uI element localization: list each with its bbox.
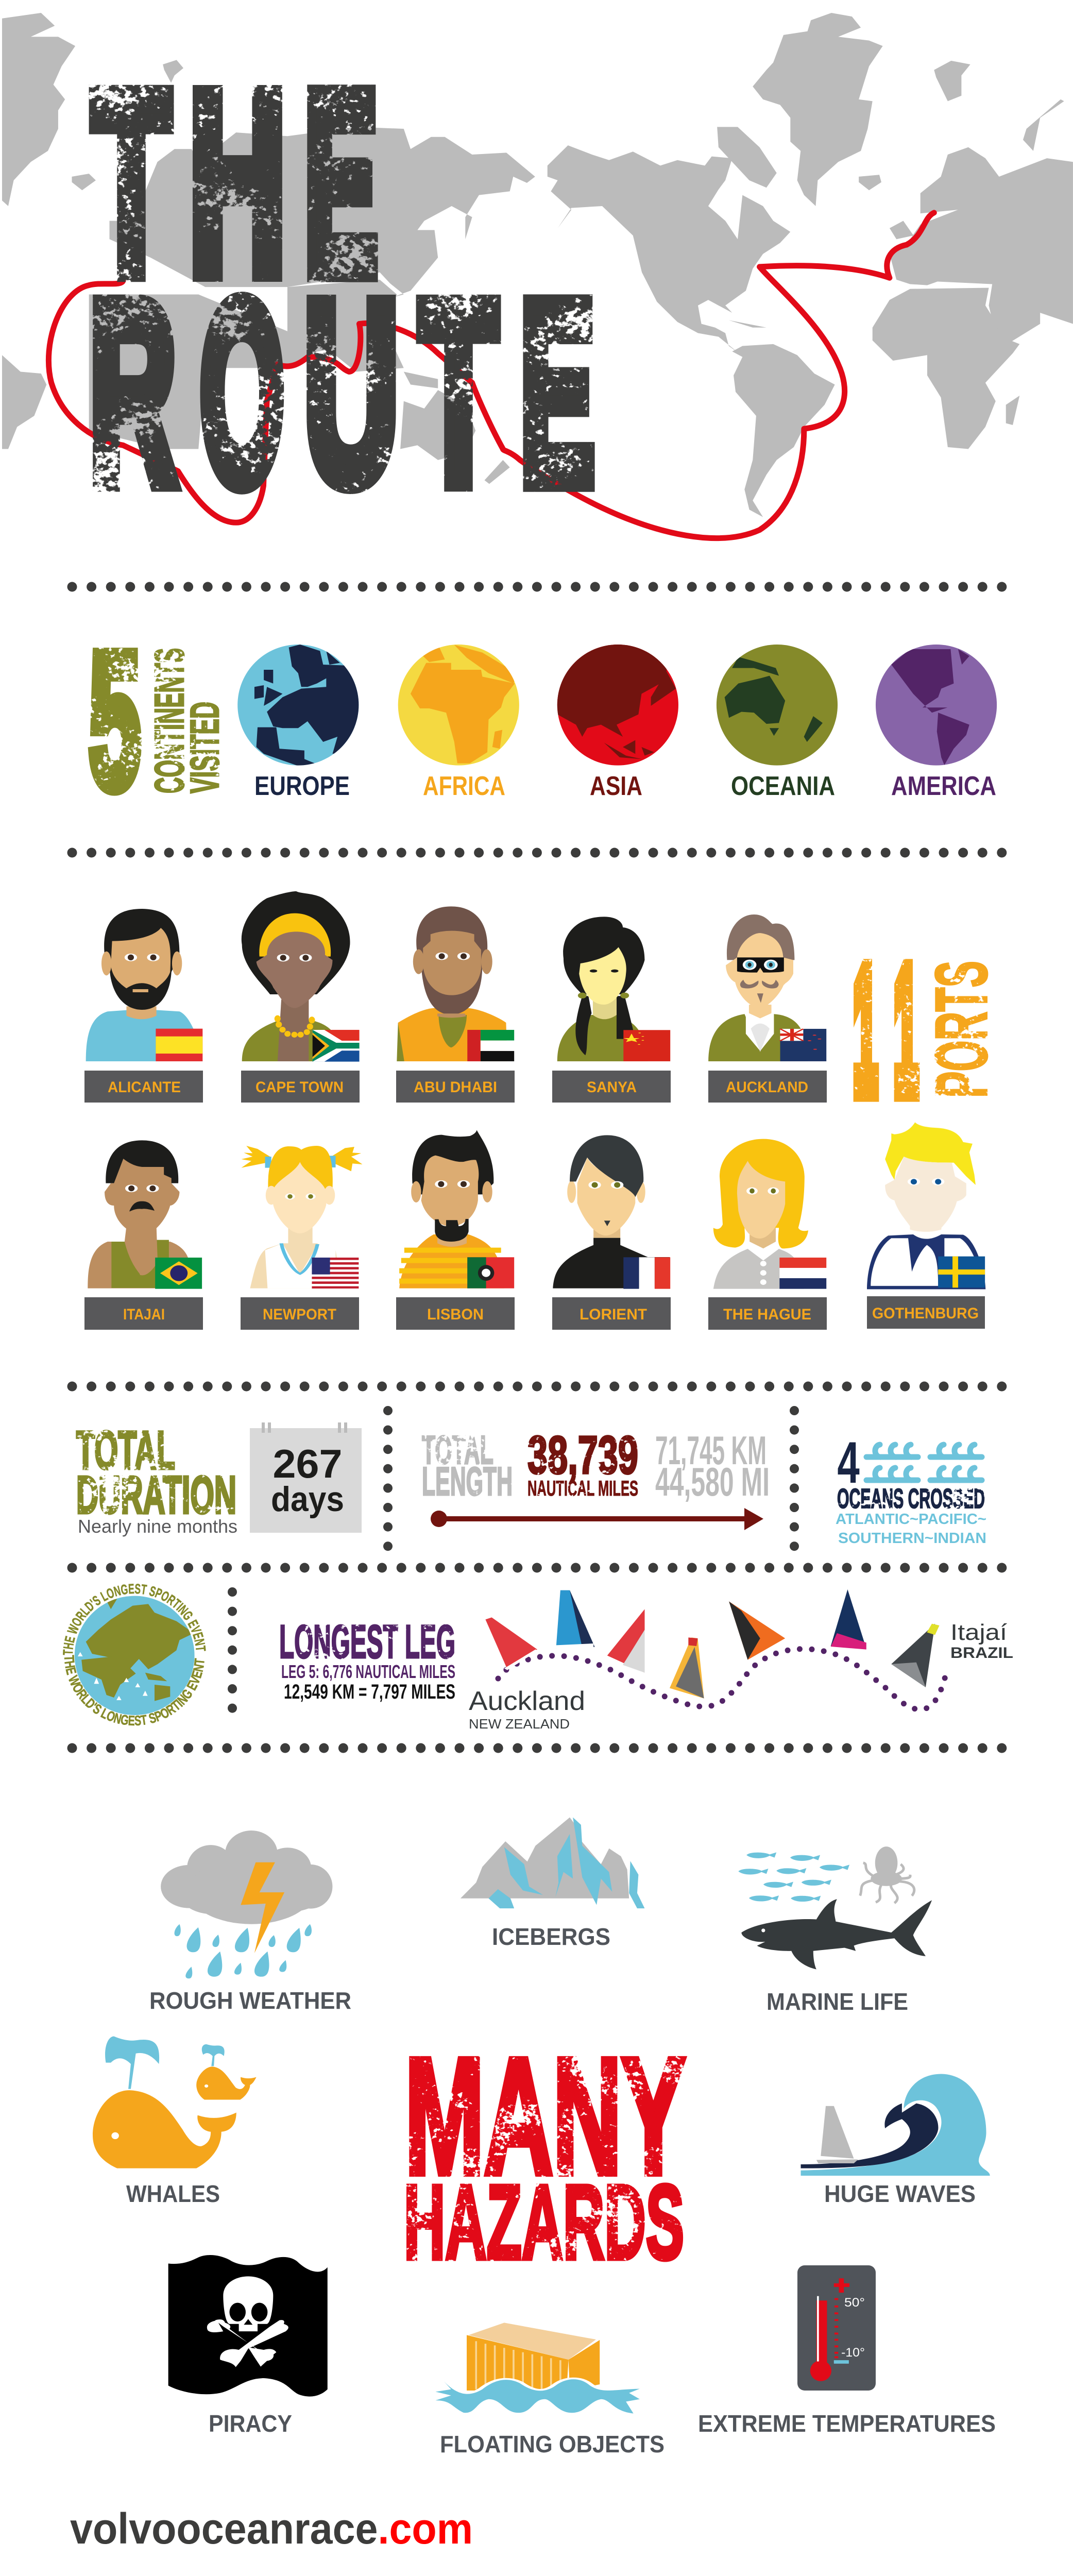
label: port names row two: NEWPORT: [263, 1306, 336, 1323]
heading: total duration: [76, 1420, 236, 1524]
heading: 11 ports: PORTS: [921, 961, 1002, 1098]
label: port names row two: [84, 1296, 985, 1330]
heading: total length: TOTAL: [422, 1427, 493, 1472]
port: Cape Town: [242, 891, 360, 1062]
ring text: [63, 1584, 206, 1726]
figures: km and miles: 71,745 KM: [655, 1428, 767, 1473]
label: port names row two: THE HAGUE: [723, 1306, 811, 1323]
panel: total length: [422, 1426, 770, 1530]
label: port names row one: SANYA: [587, 1079, 637, 1096]
text: ocean names: ATLANTIC~PACIFIC~: [836, 1511, 986, 1528]
title: THE ROUTE: O: [200, 249, 284, 536]
label: port names row two: LISBON: [427, 1306, 484, 1323]
footer: website: volvooceanrace.com: [70, 2504, 473, 2553]
icon: container in waves: [435, 2323, 640, 2413]
figure: 38,739 nautical miles: [527, 1426, 638, 1500]
icon: fish, octopus and shark: [738, 1846, 932, 1969]
label: huge waves: HUGE WAVES: [824, 2180, 976, 2207]
map: grey continents: [2, 13, 1073, 517]
title: THE ROUTE: E: [520, 250, 594, 536]
title: THE ROUTE: H: [189, 40, 286, 327]
hazard: icebergs: [461, 1818, 644, 1950]
panel: 5 continents visited: [88, 645, 997, 796]
text: km and miles: 12,549 KM = 7,797 MILES: [284, 1681, 455, 1703]
heading: 11 ports: [853, 931, 1002, 1129]
label: port names row two: GOTHENBURG: [872, 1305, 979, 1322]
label: floating objects: FLOATING OBJECTS: [440, 2431, 665, 2458]
heading: longest leg: LONGEST LEG: [279, 1616, 455, 1668]
heading: many hazards: [404, 2024, 685, 2281]
port: Itajai: [88, 1140, 202, 1289]
heading: many hazards: MANY: [405, 2024, 685, 2208]
port: Newport: [241, 1146, 363, 1289]
hazard: floating objects: [435, 2323, 665, 2458]
arrow: length: [431, 1508, 763, 1530]
calendar: 267 days: 267: [273, 1441, 342, 1486]
hazard: marine life: [738, 1846, 932, 2015]
label: Auckland New Zealand: NEW ZEALAND: [469, 1716, 570, 1732]
heading: total length: [422, 1427, 513, 1504]
continent labels: AFRICA: [423, 771, 505, 801]
label: marine life: MARINE LIFE: [767, 1988, 908, 2015]
port: Lorient: [553, 1135, 670, 1289]
figures: km and miles: 44,580 MI: [655, 1459, 770, 1504]
text: nearly nine months: Nearly nine months: [78, 1516, 237, 1537]
label: whales: WHALES: [126, 2180, 220, 2207]
calendar: 267 days: days: [271, 1480, 344, 1519]
boats: fleet of sails: [485, 1589, 940, 1699]
icon: thermometer: 50°: [844, 2296, 865, 2310]
figures: km and miles: [655, 1428, 770, 1504]
title: THE ROUTE: T: [93, 40, 170, 326]
icon: waves: [866, 1445, 982, 1480]
label: port names row one: ABU DHABI: [414, 1079, 497, 1096]
globe: America: [876, 645, 997, 766]
continent labels: [254, 771, 996, 801]
text: continents visited: CONTINENTS: [146, 648, 192, 793]
label: Itajai Brazil: Itajaí: [950, 1620, 1008, 1645]
panel: oceans crossed: [836, 1430, 986, 1547]
label: port names row two: ITAJAI: [123, 1306, 165, 1323]
panel: ports row two: [84, 1122, 985, 1330]
label: Auckland New Zealand: [469, 1686, 585, 1732]
label: extreme temperatures: EXTREME TEMPERATURES: [698, 2410, 996, 2437]
text: continents visited: VISITED: [182, 702, 227, 793]
heading: many hazards: HAZARDS: [404, 2163, 684, 2281]
calendar: 267 days: [250, 1422, 362, 1533]
ring text: THE WORLD'S LONGEST SPORTING EVENT: [63, 1584, 206, 1655]
hazard: whales: [93, 2037, 257, 2207]
icon: storm cloud: [161, 1831, 332, 1978]
port: Sanya: [557, 917, 670, 1061]
text: ocean names: [836, 1511, 986, 1547]
icon: two whales: [93, 2037, 257, 2168]
hazard: piracy: [168, 2255, 328, 2437]
figure: 38,739 nautical miles: NAUTICAL MILES: [527, 1476, 638, 1500]
label: port names row one: ALICANTE: [108, 1079, 181, 1096]
port: Abu Dhabi: [397, 906, 514, 1061]
icon: thermometer: -10°: [841, 2346, 865, 2360]
hazard: rough weather: [149, 1831, 351, 2014]
globe: Oceania: [717, 645, 838, 766]
panel: world's longest sporting event badge: [63, 1584, 206, 1726]
port: Gothenburg: [867, 1122, 985, 1290]
icon: pirate flag: [168, 2255, 328, 2397]
port: Lisbon: [399, 1130, 514, 1289]
heading: total duration: TOTAL: [76, 1420, 175, 1481]
title: THE ROUTE: [90, 40, 594, 536]
globe: Africa: [398, 645, 519, 766]
figure: 38,739 nautical miles: 38,739: [527, 1426, 638, 1485]
continent labels: OCEANIA: [731, 771, 835, 801]
label: rough weather: ROUGH WEATHER: [149, 1987, 351, 2014]
label: icebergs: ICEBERGS: [492, 1923, 610, 1950]
hazard: extreme temperatures: [698, 2265, 996, 2437]
label: piracy: PIRACY: [209, 2410, 292, 2437]
icon: thermometer: [797, 2265, 876, 2391]
title: THE ROUTE: U: [304, 249, 399, 536]
text: ocean names: SOUTHERN~INDIAN: [838, 1530, 986, 1547]
heading: total duration: DURATION: [76, 1465, 236, 1524]
port: Alicante: [86, 909, 202, 1061]
text: leg 5 nautical miles: LEG 5: 6,776 NAUTICAL MILES: [281, 1661, 455, 1682]
label: Itajai Brazil: BRAZIL: [950, 1645, 1013, 1662]
globe: Asia: [545, 645, 678, 766]
label: port names row one: CAPE TOWN: [256, 1079, 344, 1096]
world map with route: [2, 13, 1073, 538]
title: THE ROUTE: E: [304, 41, 378, 327]
panel: ports row one: [84, 891, 1002, 1129]
icon: iceberg: [461, 1818, 644, 1908]
hazard: huge waves: [801, 2074, 990, 2207]
number 5: 5: [89, 613, 141, 827]
number 4: 4: [837, 1430, 860, 1496]
heading: 11 ports: 1: [853, 931, 878, 1129]
label: port names row one: AUCKLAND: [726, 1079, 808, 1096]
title: THE ROUTE: R: [90, 250, 176, 536]
panel: total duration: [76, 1420, 362, 1537]
ring text: THE WORLD'S LONGEST SPORTING EVENT: [64, 1655, 205, 1726]
label: port names row one: [84, 1071, 827, 1103]
panel: longest leg: [279, 1589, 1013, 1732]
heading: 11 ports: 1: [894, 931, 918, 1129]
globe: [75, 1596, 195, 1715]
port: Auckland: [708, 914, 826, 1061]
globe: Europe: [237, 645, 361, 766]
text: continents visited: [146, 648, 227, 793]
port: The Hague: [713, 1139, 826, 1289]
continent labels: EUROPE: [254, 771, 350, 801]
continent labels: ASIA: [590, 771, 642, 801]
panel: many hazards: [93, 1818, 996, 2458]
label: port names row two: LORIENT: [580, 1306, 647, 1323]
title: THE ROUTE: T: [420, 250, 497, 536]
route: red race line: [48, 213, 934, 538]
route: dotted line: [498, 1649, 947, 1709]
label: Itajai Brazil: [950, 1620, 1013, 1662]
heading: total length: LENGTH: [422, 1459, 513, 1504]
label: Auckland New Zealand: Auckland: [469, 1686, 585, 1716]
continent labels: AMERICA: [891, 771, 996, 801]
icon: wave and sailboat: [801, 2074, 990, 2176]
